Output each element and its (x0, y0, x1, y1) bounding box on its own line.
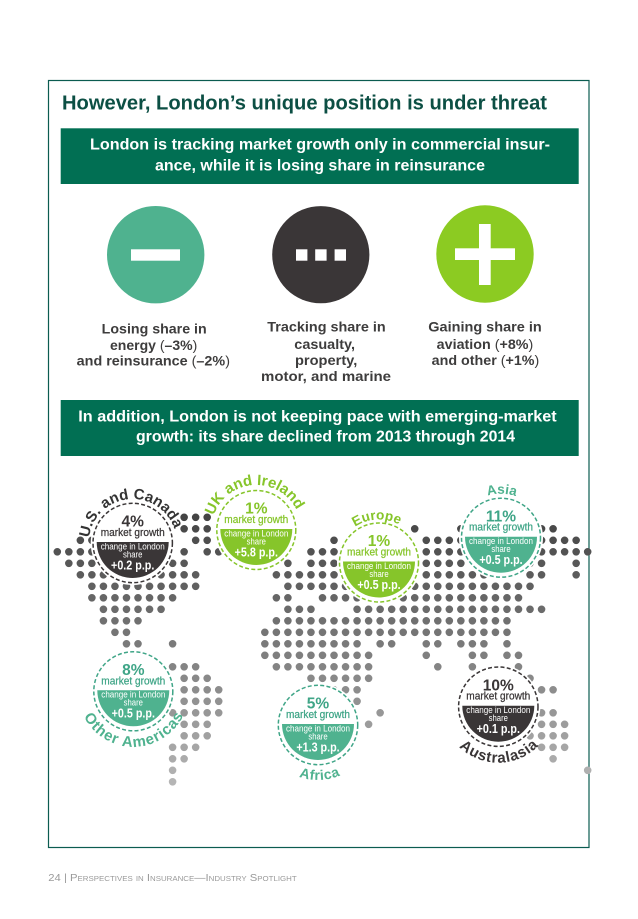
region: Australasia: +0.1 p.p. (477, 721, 520, 736)
icon: tracking dots (272, 206, 369, 303)
region: Africa: +1.3 p.p. (296, 739, 340, 754)
banner: emerging markets: In addition, London is not keeping pace with emerging-market (78, 409, 557, 426)
footer: 24 | Perspectives in Insurance—Industry Spotlight (48, 873, 297, 884)
title: However, London’s unique position is under threat (62, 92, 547, 114)
region: UK and Ireland: change in London (224, 528, 288, 538)
text: gaining share: Gaining share in (428, 319, 542, 335)
text: gaining share (428, 319, 542, 368)
region: Africa: change in London (286, 723, 350, 733)
region: Australasia (458, 666, 540, 763)
region: Australasia: Australasia (459, 742, 538, 763)
region: U.S. and Canada: +0.2 p.p. (111, 557, 154, 572)
region: U.S. and Canada: share (123, 549, 142, 559)
banner: commercial insurance: London is tracking market growth only in commercial insur- (90, 136, 550, 153)
region: UK and Ireland (204, 474, 306, 570)
region: U.S. and Canada: U.S. and Canada (79, 488, 181, 536)
text: losing share: Losing share in (102, 320, 207, 336)
icon: minus (107, 206, 204, 303)
region: U.S. and Canada: market growth (101, 527, 165, 539)
region: Asia: change in London (469, 536, 533, 546)
text: gaining share: and other (+1%) (432, 352, 539, 368)
region: U.S. and Canada: change in London (101, 541, 165, 551)
region: Africa: Africa (299, 768, 340, 780)
region: Australasia: market growth (466, 691, 530, 703)
region: UK and Ireland: share (247, 536, 266, 546)
text: losing share (77, 320, 230, 369)
text: gaining share: aviation (+8%) (437, 336, 533, 352)
banner: commercial insurance: ance, while it is losing share in reinsurance (155, 158, 485, 175)
region: Other Americas: Other Americas (86, 713, 182, 748)
region: UK and Ireland: +5.8 p.p. (235, 544, 278, 559)
region: UK and Ireland: UK and Ireland (204, 474, 306, 514)
text: tracking share: motor, and marine (261, 368, 391, 384)
text: tracking share: Tracking share in (267, 319, 386, 335)
text: tracking share (261, 319, 391, 384)
banner: emerging markets: growth: its share declined from 2013 through 2014 (136, 429, 515, 446)
banner: emerging markets (61, 400, 579, 456)
region: Europe: Europe (351, 512, 401, 526)
region: Other Americas: market growth (101, 675, 165, 687)
region: U.S. and Canada: 4% (121, 514, 144, 531)
region: Europe: change in London (347, 561, 411, 571)
region: Asia: share (491, 544, 511, 554)
region: Other Americas: change in London (101, 690, 165, 700)
region: Africa: share (308, 731, 328, 741)
region: Europe: share (369, 569, 389, 579)
region: Europe: +0.5 p.p. (357, 577, 401, 592)
region: Asia: market growth (469, 522, 533, 534)
dotted world map (57, 517, 588, 782)
region: Other Americas: +0.5 p.p. (112, 706, 155, 721)
region: Asia: Asia (488, 484, 516, 496)
region: Australasia: change in London (466, 705, 530, 715)
region: Australasia: share (489, 713, 508, 723)
region: Asia: +0.5 p.p. (479, 552, 523, 567)
region: Africa (278, 684, 358, 780)
panel: frame (48, 80, 589, 848)
region: Other Americas (86, 651, 182, 748)
banner: commercial insurance (61, 128, 579, 184)
region: UK and Ireland: market growth (224, 514, 288, 526)
region: UK and Ireland: 1% (245, 501, 268, 518)
region: Africa: 5% (307, 696, 329, 713)
icon: plus (436, 205, 534, 303)
text: tracking share: property, (295, 352, 357, 368)
region: Other Americas: 8% (122, 662, 145, 679)
region: Australasia: 10% (483, 677, 514, 694)
text: losing share: and reinsurance (–2%) (77, 353, 230, 369)
region: Asia: 11% (486, 508, 516, 525)
region: Other Americas: share (124, 698, 143, 708)
region: Europe: 1% (368, 533, 390, 550)
region: Europe: market growth (347, 546, 411, 558)
text: losing share: energy (–3%) (110, 337, 197, 353)
region: Europe (337, 512, 420, 603)
region: Africa: market growth (286, 709, 350, 721)
region: Asia (459, 484, 543, 578)
text: tracking share: casualty, (294, 336, 355, 352)
region: U.S. and Canada (79, 488, 181, 585)
